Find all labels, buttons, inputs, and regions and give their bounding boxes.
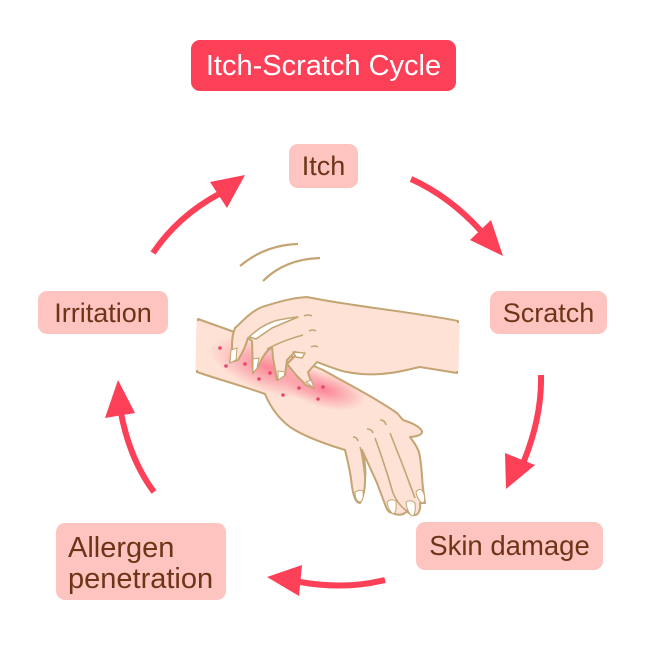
nails on upper hand	[230, 348, 314, 388]
arrow: scratch to skin damage	[505, 375, 541, 489]
label: Irritation	[38, 291, 168, 334]
arrow: skin damage to allergen	[267, 565, 385, 596]
label: Skin damage	[416, 522, 603, 570]
nails on lower hand	[355, 489, 425, 516]
redness	[214, 340, 362, 408]
label: Allergen penetration: Allergen	[68, 532, 174, 564]
label: Irritation: Irritation	[54, 298, 152, 328]
label: Scratch: Scratch	[503, 298, 594, 328]
cycle arrows and illustration	[105, 175, 544, 596]
upper hand	[230, 297, 458, 388]
label: Skin damage: Skin damage	[429, 530, 590, 561]
arrow: irritation to itch	[153, 175, 245, 253]
arrow: itch to scratch	[411, 179, 503, 256]
lower arm and hand	[197, 319, 425, 515]
title: Itch-Scratch Cycle	[206, 50, 441, 82]
motion lines	[240, 244, 320, 281]
finger lines on lower hand	[353, 420, 415, 511]
label: Allergen penetration	[56, 523, 226, 600]
red spots	[218, 346, 325, 401]
finger gaps on upper hand	[249, 317, 305, 358]
label: Itch	[289, 144, 358, 188]
label: Allergen penetration: penetration	[68, 563, 213, 595]
illustration: scratching hands	[197, 244, 458, 516]
label: Scratch	[490, 291, 607, 334]
label: Itch: Itch	[302, 151, 345, 181]
knuckle marks on upper hand	[304, 315, 318, 347]
title	[191, 40, 456, 91]
arrow: allergen to irritation	[105, 380, 154, 492]
open cut ends of arms	[197, 321, 458, 371]
